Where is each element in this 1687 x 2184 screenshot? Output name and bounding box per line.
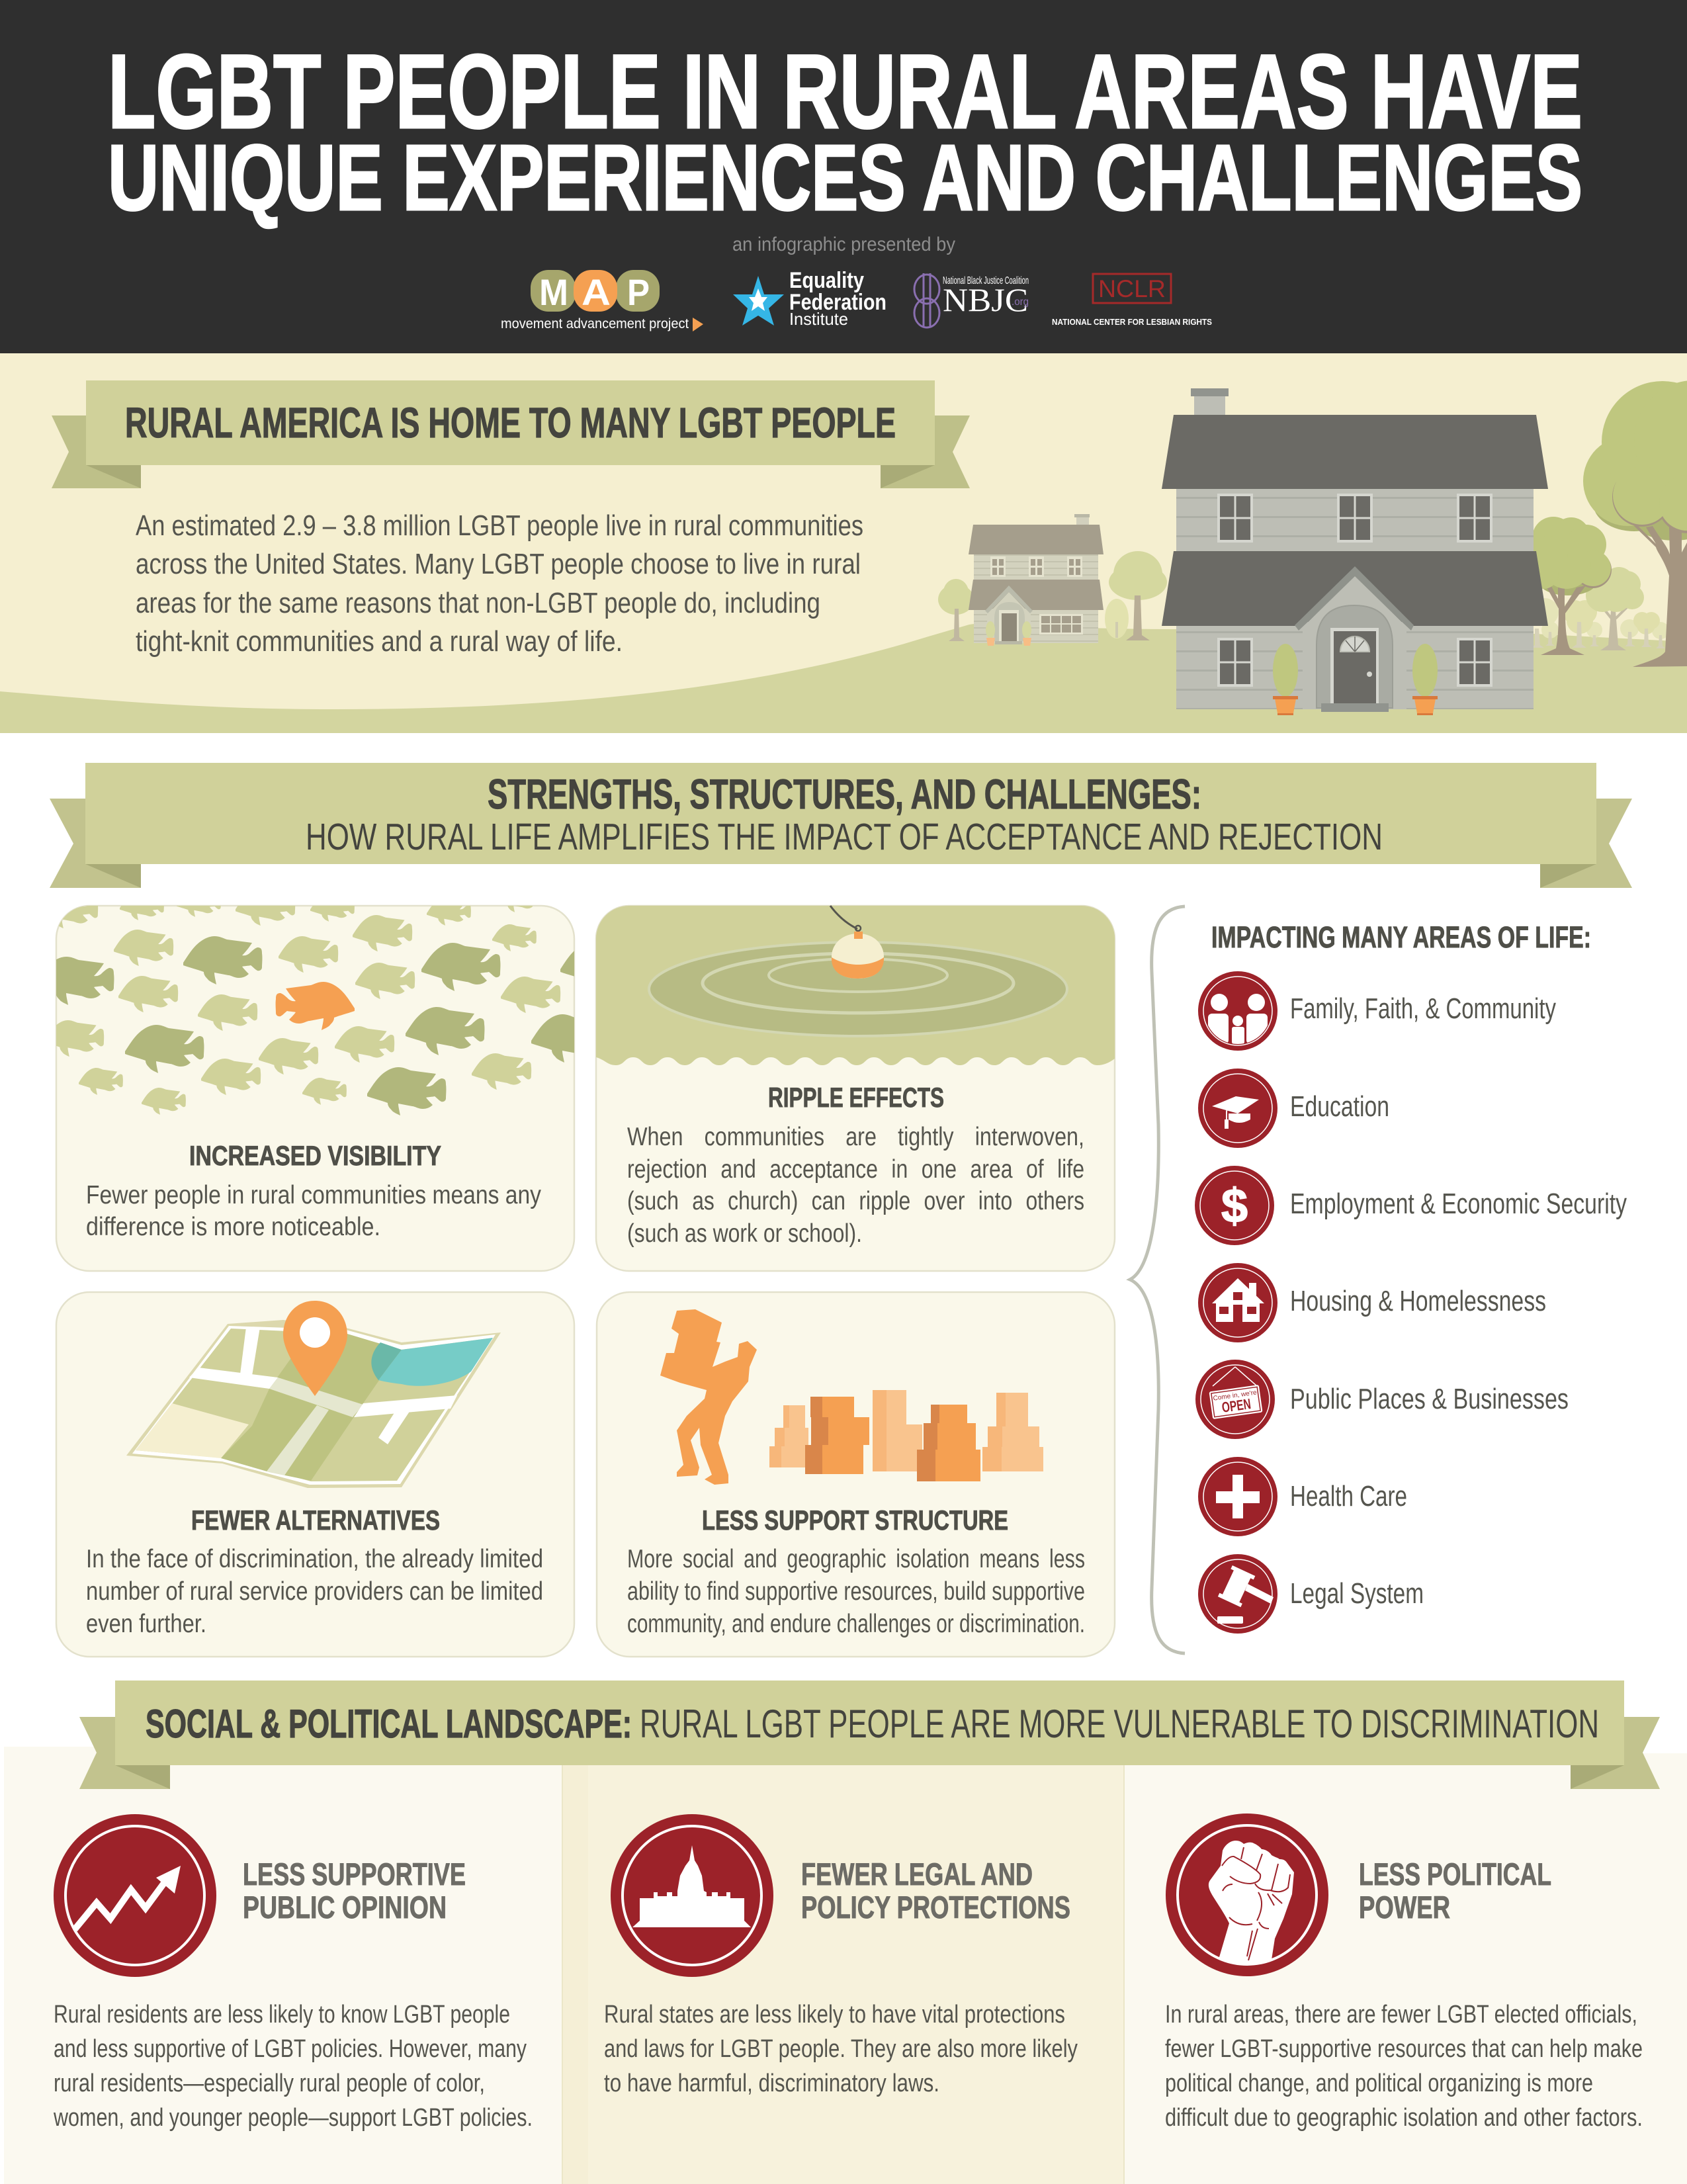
body text: (such as church) can ripple over into others [627, 1187, 1084, 1215]
heading: FEWER LEGAL AND [801, 1856, 1033, 1892]
body text [86, 1545, 543, 1638]
item: employment [1195, 1166, 1627, 1245]
body text: even further. [86, 1610, 206, 1638]
item: housing [1198, 1263, 1546, 1342]
heading line 1: STRENGTHS, STRUCTURES, AND CHALLENGES: [488, 771, 1201, 818]
item: education [1198, 1069, 1389, 1148]
body text: Rural states are less likely to have vital protections [604, 2001, 1065, 2029]
small house trees [938, 551, 1167, 641]
heading bold part: SOCIAL & POLITICAL LANDSCAPE: [146, 1702, 632, 1746]
panel: increased visibility [56, 905, 576, 1272]
body text: political change, and political organizing is more [1165, 2070, 1593, 2097]
logo: NBJC [914, 273, 1029, 328]
body text: In the face of discrimination, the already limited [86, 1545, 543, 1573]
logo: Equality Federation Institute: Federation [789, 290, 887, 315]
banner: rural america [52, 380, 970, 488]
body text: Rural residents are less likely to know LGBT people [54, 2001, 510, 2029]
logo: MAP: movement advancement project [501, 316, 689, 331]
brace [1130, 906, 1185, 1653]
heading [1359, 1856, 1551, 1925]
ripples [649, 942, 1067, 1036]
fish school [35, 885, 639, 1115]
icon: raised fist [1166, 1813, 1328, 1976]
item: health care: Health Care [1290, 1480, 1407, 1512]
logo: NCLR: NCLR [1098, 275, 1166, 302]
body text [86, 1181, 541, 1241]
background trees right [1531, 598, 1669, 648]
item: public places: Public Places & Businesses [1290, 1383, 1569, 1415]
logo: NCLR: NATIONAL CENTER FOR LESBIAN RIGHTS [1052, 317, 1212, 327]
body text: When communities are tightly interwoven, [627, 1123, 1084, 1151]
body text [1165, 2001, 1643, 2132]
body text: rejection and acceptance in one area of life [627, 1155, 1084, 1184]
logo: Equality Federation Institute: Equality [789, 268, 864, 293]
body text: community, and endure challenges or discrimination. [627, 1610, 1085, 1638]
item: employment: $ [1221, 1180, 1248, 1233]
intro paragraph: areas for the same reasons that non-LGBT people do, including [136, 587, 820, 619]
heading: PUBLIC OPINION [243, 1890, 447, 1925]
intro paragraph [136, 509, 863, 658]
item: public places [1195, 1360, 1569, 1439]
heading: LESS SUPPORTIVE [243, 1856, 466, 1892]
body text [53, 2001, 533, 2132]
logo: MAP: A [582, 271, 611, 313]
panel: ripple effects [596, 906, 1115, 1271]
heading: FEWER ALTERNATIVES [191, 1505, 440, 1536]
logo: Equality Federation Institute: Institute [789, 309, 848, 329]
item: family [1198, 971, 1556, 1051]
heading [243, 1856, 466, 1925]
icon: capitol [611, 1814, 773, 1977]
body text [627, 1123, 1084, 1248]
body text: difference is more noticeable. [86, 1213, 380, 1241]
heading: RIPPLE EFFECTS [768, 1082, 944, 1113]
body text: (such as work or school). [627, 1219, 862, 1248]
icon: small house [969, 514, 1103, 646]
body text: and laws for LGBT people. They are also more likely [604, 2035, 1078, 2063]
tree: large right [1583, 380, 1687, 667]
logo: NCLR [1052, 274, 1212, 327]
item: housing: Housing & Homelessness [1290, 1285, 1546, 1317]
heading: POLICY PROTECTIONS [801, 1890, 1070, 1925]
logo: MAP: P [627, 271, 650, 313]
title [108, 32, 1582, 230]
item: legal system: Legal System [1290, 1577, 1424, 1610]
tree: back right [1586, 567, 1644, 650]
body text: and less supportive of LGBT policies. However, many [54, 2035, 527, 2063]
item: public places: Come in, we're [1213, 1389, 1258, 1403]
panel: less support structure [597, 1292, 1115, 1657]
heading: RURAL AMERICA IS HOME TO MANY LGBT PEOPLE [125, 399, 896, 447]
banner: social and political landscape [79, 1681, 1660, 1789]
water [596, 906, 1115, 1065]
body text: rural residents—especially rural people of color, [54, 2070, 485, 2097]
icon: rising arrow [54, 1814, 216, 1977]
logo: NBJC: NBJC [943, 281, 1028, 318]
body text [604, 2001, 1078, 2097]
item: legal system [1198, 1554, 1424, 1634]
panel: fewer alternatives [56, 1292, 574, 1657]
logo: MAP: M [539, 271, 568, 313]
logo: NBJC: National Black Justice Coalition [943, 275, 1029, 286]
icon: person carrying boxes [660, 1309, 757, 1485]
intro paragraph: An estimated 2.9 – 3.8 million LGBT people live in rural communities [136, 509, 863, 542]
icon: map [126, 1301, 501, 1488]
item: health care [1198, 1457, 1407, 1536]
panel: rural america [0, 353, 1687, 733]
body text: number of rural service providers can be limited [86, 1577, 543, 1606]
icon: large house [1162, 388, 1548, 715]
panel: fewer legal and policy protections [562, 1765, 1125, 2184]
heading line 2: HOW RURAL LIFE AMPLIFIES THE IMPACT OF ACCEPTANCE AND REJECTION [306, 816, 1383, 858]
body text: Fewer people in rural communities means any [86, 1181, 541, 1209]
heading: POWER [1359, 1890, 1450, 1925]
body text: women, and younger people—support LGBT policies. [53, 2104, 533, 2132]
panel: less political power [1125, 1753, 1687, 2184]
banner: strengths, structures, and challenges [50, 763, 1632, 888]
heading: INCREASED VISIBILITY [189, 1140, 441, 1171]
item: education: Education [1290, 1090, 1389, 1123]
body text [627, 1545, 1085, 1638]
body text: to have harmful, discriminatory laws. [604, 2070, 939, 2097]
tree: mid right [1528, 517, 1612, 655]
logo: Equality Federation Institute [733, 268, 887, 329]
body text: ability to find supportive resources, build supportive [627, 1577, 1085, 1606]
item: family: Family, Faith, & Community [1290, 992, 1556, 1025]
intro paragraph: tight-knit communities and a rural way of life. [136, 625, 623, 658]
logo: MAP [501, 270, 703, 331]
logo: NBJC: .org [1012, 296, 1029, 308]
ground hill [0, 623, 1687, 733]
header band [0, 0, 1687, 353]
icon: bobber [830, 906, 884, 979]
icon: box stacks [769, 1390, 1043, 1481]
body text: More social and geographic isolation means less [627, 1545, 1085, 1573]
intro paragraph: across the United States. Many LGBT people choose to live in rural [136, 548, 861, 580]
presented by: an infographic presented by [732, 234, 955, 255]
item: public places: OPEN [1221, 1395, 1252, 1416]
heading: LESS SUPPORT STRUCTURE [702, 1505, 1008, 1536]
panel: less supportive public opinion [4, 1747, 562, 2184]
heading: LESS POLITICAL [1359, 1856, 1551, 1892]
panel: impacting many areas of life [1130, 906, 1627, 1653]
icon: location pin [283, 1301, 347, 1396]
heading [801, 1856, 1070, 1925]
